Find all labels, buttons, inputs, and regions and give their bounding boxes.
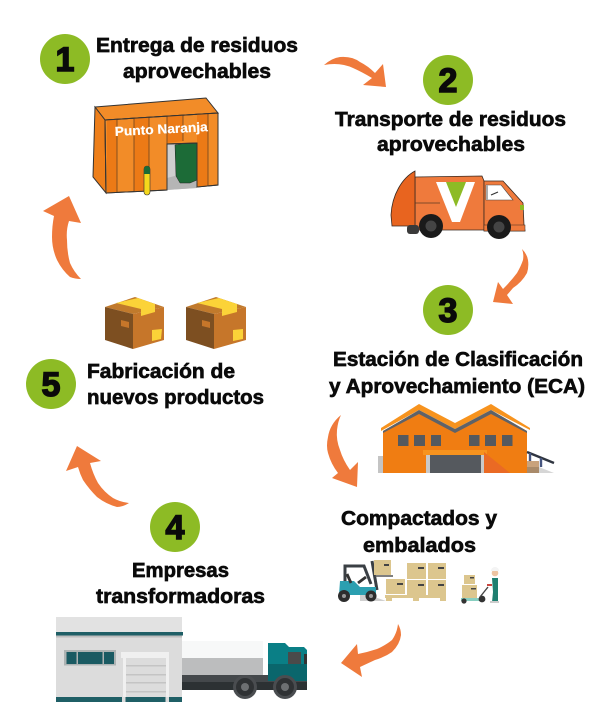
- step 5 heading: nuevos productos: [87, 387, 264, 409]
- arrow: compactados to step 4: [341, 624, 401, 677]
- arrow: step 5 to 1: [43, 196, 81, 279]
- step 1 heading: Entrega de residuos: [96, 35, 298, 57]
- arrow: step 2 to 3: [493, 249, 528, 304]
- icon: collection truck: [391, 171, 525, 239]
- step 2 heading: aprovechables: [377, 134, 525, 156]
- step 1 number badge: [40, 34, 90, 84]
- step 1 heading: aprovechables: [123, 61, 271, 83]
- step 2 number badge: [423, 55, 473, 105]
- step: compactados heading: Compactados y: [341, 508, 498, 530]
- step 3 heading: [329, 349, 585, 398]
- icon: factory with truck: [56, 617, 307, 702]
- step 2 heading: [335, 109, 566, 156]
- step 4 number badge: 4: [166, 509, 185, 547]
- step 2 number badge: 2: [439, 62, 457, 100]
- step 3 number badge: [423, 285, 473, 335]
- arrow: step 4 to 5: [66, 446, 129, 507]
- booth label text: Punto Naranja: [114, 119, 209, 139]
- step 5 heading: [87, 361, 264, 409]
- step 5 number badge: 5: [42, 366, 60, 404]
- step 5 heading: Fabricación de: [87, 361, 235, 383]
- arrow: step 3 to compactados: [327, 415, 358, 487]
- step 3 number badge: 3: [439, 292, 457, 330]
- icon: Punto Naranja booth: [93, 98, 218, 195]
- step 3 heading: y Aprovechamiento (ECA): [329, 376, 585, 398]
- icon: ECA warehouse: [378, 404, 554, 473]
- step 4 number badge: [150, 502, 200, 552]
- step 4 heading: Empresas: [132, 560, 229, 582]
- step 4 heading: [96, 560, 265, 608]
- step 4 heading: transformadoras: [96, 586, 265, 608]
- step 5 number badge: [26, 359, 76, 409]
- step: compactados heading: [341, 508, 498, 557]
- step 1 heading: [96, 35, 298, 83]
- icon: worker with hand truck: [461, 567, 499, 604]
- icon: cardboard box right: [186, 297, 246, 349]
- step: compactados heading: embalados: [363, 535, 476, 557]
- icon: forklift with pallets: [338, 560, 477, 602]
- icon: cardboard box left: [105, 297, 164, 349]
- step 2 heading: Transporte de residuos: [335, 109, 566, 131]
- step 3 heading: Estación de Clasificación: [333, 349, 583, 371]
- step 1 number badge: 1: [56, 41, 74, 79]
- arrow: step 1 to 2: [324, 57, 386, 87]
